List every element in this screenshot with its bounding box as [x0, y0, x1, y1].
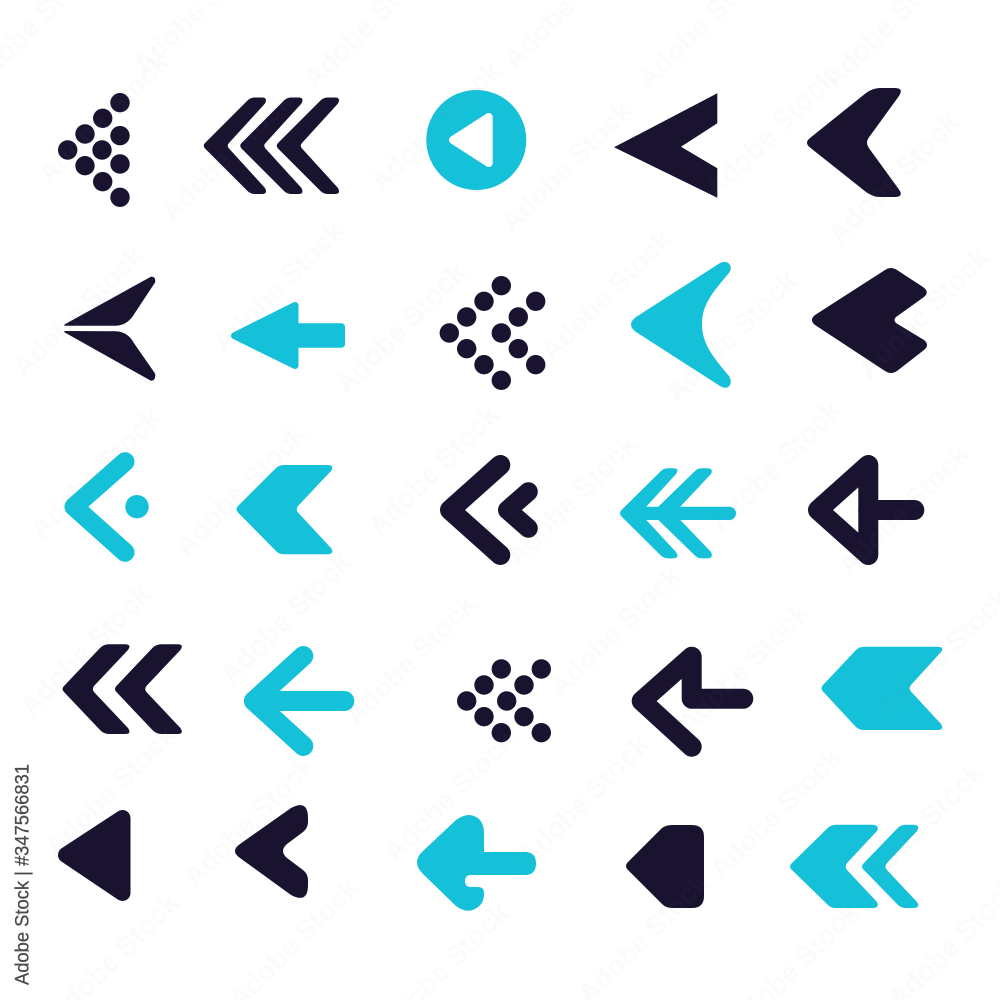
- watermark pattern: Adobe Stock: [339, 589, 482, 732]
- stock id caption: Adobe Stock | #347566831: [12, 764, 34, 985]
- watermark pattern: Adobe Stock: [660, 265, 803, 408]
- watermark pattern: Adobe Stock: [699, 62, 842, 205]
- icon: dark pentagon arrow: [626, 825, 704, 908]
- watermark pattern: Adobe Stock: [847, 757, 990, 900]
- icon: dark double chevron: [62, 644, 182, 734]
- icon: sharp arrowhead: [614, 93, 717, 198]
- icon: dotted arrow small: [58, 93, 130, 207]
- watermark pattern: Adobe Stock: [14, 579, 157, 722]
- watermark pattern: Adobe Stock: [512, 729, 655, 872]
- icon: dark outlined triangle arrow: [818, 465, 914, 555]
- watermark pattern: Adobe Stock: [207, 215, 350, 358]
- icon: teal chevron with dot: [74, 462, 149, 552]
- watermark pattern: Adobe Stock: [362, 399, 505, 542]
- icon: dark bent arrow: [642, 657, 743, 747]
- icon: teal line arrow: [254, 656, 344, 746]
- icon: teal wide notched arrow: [822, 647, 942, 730]
- icon: rounded arrowhead: [807, 88, 901, 197]
- watermark pattern: Adobe Stock: [24, 402, 167, 545]
- watermark pattern: Adobe Stock: [214, 547, 357, 690]
- icon: play-back circle: [426, 90, 526, 190]
- watermark pattern: Adobe Stock: [155, 85, 298, 228]
- watermark pattern: Adobe Stock: [378, 725, 521, 868]
- watermark pattern: Adobe Stock: [495, 95, 638, 238]
- icon: dotted arrow outline: [440, 276, 545, 390]
- icon: teal wide and thin chevrons: [790, 825, 918, 908]
- icon: teal fat arrow: [417, 815, 536, 911]
- watermark pattern: Adobe Stock: [7, 240, 150, 383]
- watermark pattern: Adobe Stock: [704, 742, 847, 885]
- watermark pattern: Adobe Stock: [544, 560, 687, 703]
- watermark pattern: Adobe Stock: [672, 597, 815, 740]
- watermark pattern: Adobe Stock: [178, 750, 321, 893]
- watermark pattern: Adobe Stock: [704, 395, 847, 538]
- watermark pattern: Adobe Stock: [364, 55, 507, 198]
- watermark pattern: Adobe Stock: [822, 107, 965, 250]
- watermark pattern: Adobe Stock: [32, 47, 175, 190]
- icon: teal curved arrowhead: [631, 262, 731, 388]
- icon: triple chevron: [204, 98, 339, 194]
- watermark pattern: Adobe Stock: [832, 439, 975, 582]
- watermark pattern: Adobe Stock: [169, 419, 312, 562]
- icon: teal block arrow: [234, 306, 342, 366]
- icon: dark big and small chevrons: [450, 465, 528, 555]
- watermark pattern: Adobe Stock: [535, 224, 678, 367]
- icon: teal wide chevron: [236, 465, 332, 554]
- icon: teal feathered arrow: [620, 468, 736, 558]
- watermark pattern: Adobe Stock: [852, 242, 995, 385]
- watermark pattern: Adobe Stock: [329, 257, 472, 400]
- icon: dotted arrow wide: [457, 659, 551, 742]
- icon: dark triangle: [66, 818, 122, 893]
- watermark pattern: Adobe Stock: [39, 719, 182, 862]
- icon: paper plane arrow: [65, 277, 155, 380]
- icon: dark rounded chevron: [235, 805, 308, 898]
- watermark pattern: Adobe Stock: [500, 429, 643, 572]
- icon: dark notched diamond arrow: [812, 268, 927, 373]
